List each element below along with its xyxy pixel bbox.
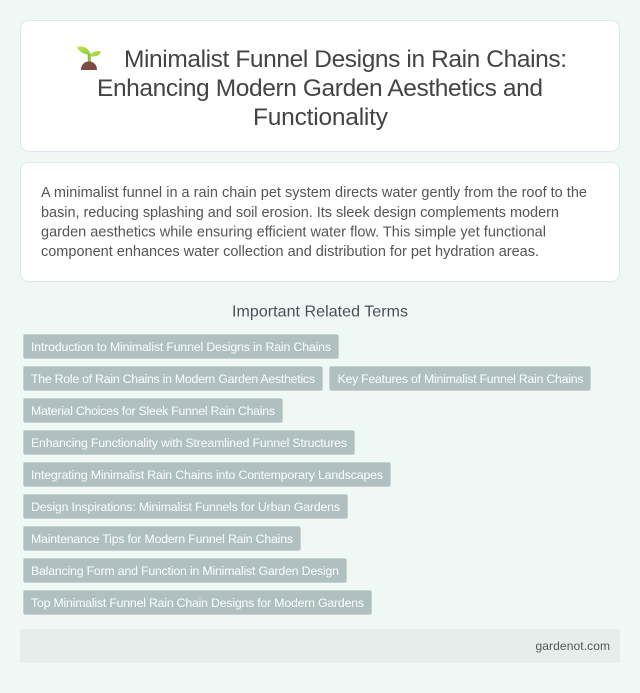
tag: Integrating Minimalist Rain Chains into Contemporary Landscapes [31, 468, 383, 482]
tag [24, 494, 348, 518]
text block: description: basin, reducing splashing and soil erosion. Its sleek design complements modern [41, 205, 559, 221]
footer [20, 629, 620, 663]
tag [24, 430, 354, 454]
tag: Material Choices for Sleek Funnel Rain Chains [31, 404, 275, 418]
tag: Key Features of Minimalist Funnel Rain Chains [338, 372, 584, 386]
text block: description [41, 185, 587, 260]
tag: Design Inspirations: Minimalist Funnels for Urban Gardens [31, 500, 340, 514]
panel: title card [20, 20, 620, 152]
tag [24, 590, 372, 614]
tag: Maintenance Tips for Modern Funnel Rain Chains [31, 532, 293, 546]
tag: The Role of Rain Chains in Modern Garden Aesthetics [31, 372, 315, 386]
icon: seedling [77, 46, 101, 70]
tag [24, 398, 282, 422]
text block: description: component enhances water collection and distribution for pet hydration areas. [41, 244, 539, 260]
tag [24, 462, 390, 486]
footer: gardenot.com [536, 639, 610, 653]
tag [24, 526, 300, 550]
tag: Enhancing Functionality with Streamlined Funnel Structures [31, 436, 347, 450]
tag [24, 334, 338, 358]
tag [24, 558, 346, 582]
title [97, 46, 567, 131]
text block: description: A minimalist funnel in a rain chain pet system directs water gently from the roof to the [41, 185, 587, 201]
text block: description: garden aesthetics while ensuring efficient water flow. This simple yet functional [41, 224, 546, 240]
tag: Introduction to Minimalist Funnel Designs in Rain Chains [31, 340, 331, 354]
heading: related terms: Important Related Terms [232, 304, 408, 320]
title: Functionality [253, 104, 389, 131]
tag [24, 366, 322, 390]
tag: Balancing Form and Function in Minimalist Garden Design [31, 564, 339, 578]
title: Minimalist Funnel Designs in Rain Chains: [124, 46, 567, 73]
tag [330, 366, 590, 390]
title: Enhancing Modern Garden Aesthetics and [97, 75, 543, 102]
tag: Top Minimalist Funnel Rain Chain Designs for Modern Gardens [31, 596, 364, 610]
panel: related term tags [24, 334, 590, 614]
panel: description [20, 162, 620, 282]
